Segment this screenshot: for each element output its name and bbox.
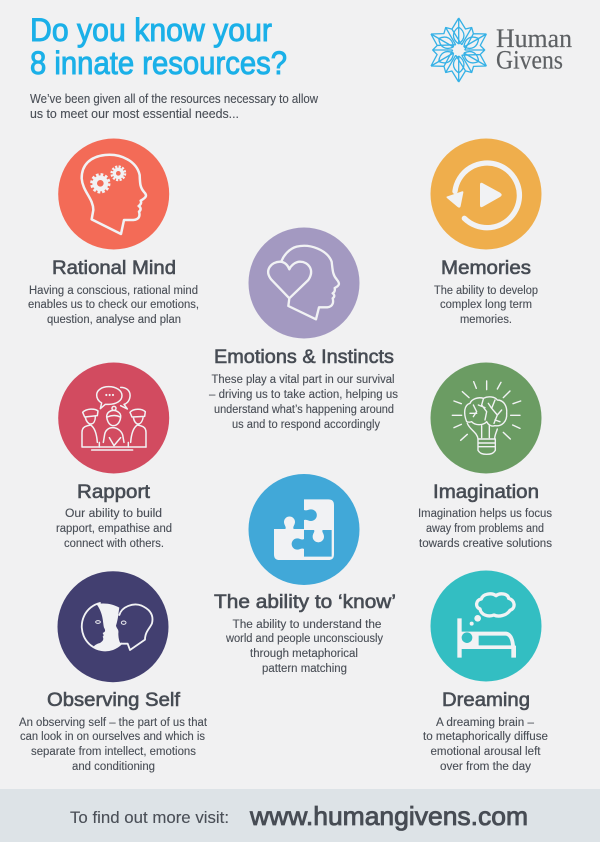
footer prompt: To find out more visit: [70,809,229,827]
icon: two faces [58,571,168,682]
description: to metaphorically diffuse [423,731,548,743]
description: world and people unconsciously [225,633,383,645]
heading: Emotions & Instincts [214,346,394,368]
description [28,285,199,326]
panel: Observing Self [19,571,208,773]
icon: brain light bulb [430,362,542,474]
heading: Imagination [433,481,539,503]
description: separate from intellect, emotions [31,746,196,758]
description [56,508,172,550]
description: The ability to develop [434,285,538,297]
icon: replay [430,138,542,250]
description: Imagination helps us focus [418,508,552,520]
description: can look in on ourselves and which is [20,731,205,743]
intro text: We’ve been given all of the resources necessary to allow [30,91,319,106]
panel: Rapport [56,362,172,550]
description: over from the day [440,761,531,773]
description [19,717,208,773]
logo wordmark [496,24,572,74]
description: A dreaming brain – [436,717,535,729]
panel: Dreaming [423,570,548,773]
description [423,717,548,773]
description: Our ability to build [65,508,162,520]
description: complex long term [440,299,532,311]
description: away from problems and [426,523,544,535]
heading: Rapport [77,481,151,503]
description: The ability to understand the [232,619,382,631]
description [434,285,538,326]
description: us and to respond accordingly [232,419,380,431]
icon: head with heart [248,228,360,338]
description: pattern matching [262,663,347,675]
icon: jigsaw puzzle [248,474,360,585]
description [209,374,398,431]
panel: Rational Mind [28,138,199,326]
description: enables us to check our emotions, [28,299,199,311]
description: – driving us to take action, helping us [209,389,398,401]
heading: The ability to ‘know’ [214,591,396,613]
logo wordmark: Human [496,24,572,53]
description: Having a conscious, rational mind [29,285,198,297]
intro text: us to meet our most essential needs... [30,106,239,121]
heading: Observing Self [47,689,181,711]
title [30,12,287,81]
panel: The ability to know [214,474,396,675]
logo wordmark: Givens [496,46,563,74]
title: Do you know your [30,12,272,48]
description: connect with others. [64,538,164,550]
description: An observing self – the part of us that [19,717,208,729]
description: question, analyse and plan [47,314,181,326]
icon: logo star [417,10,500,90]
panel: Memories [430,138,542,326]
description: emotional arousal left [430,746,541,758]
panel: Imagination [418,362,552,550]
title: 8 innate resources? [30,45,287,81]
description: through metaphorical [250,648,358,660]
intro text [30,91,319,121]
heading: Memories [441,257,531,279]
heading: Dreaming [442,689,530,711]
description: towards creative solutions [419,538,552,550]
description: memories. [460,314,512,326]
logo: Human Givens [417,10,572,90]
description: understand what’s happening around [214,404,394,416]
footer band [0,789,600,842]
heading: Rational Mind [52,257,176,279]
icon: head with gears [58,138,169,250]
icon: three people talking [58,362,169,474]
description [225,619,383,675]
description: These play a vital part in our survival [212,374,394,386]
footer URL: www.humangivens.com [249,801,528,831]
description [418,508,552,550]
description: and conditioning [72,761,155,773]
icon: bed with thought cloud [430,570,542,682]
panel: Emotions & Instincts [209,228,398,431]
description: rapport, empathise and [56,523,172,535]
